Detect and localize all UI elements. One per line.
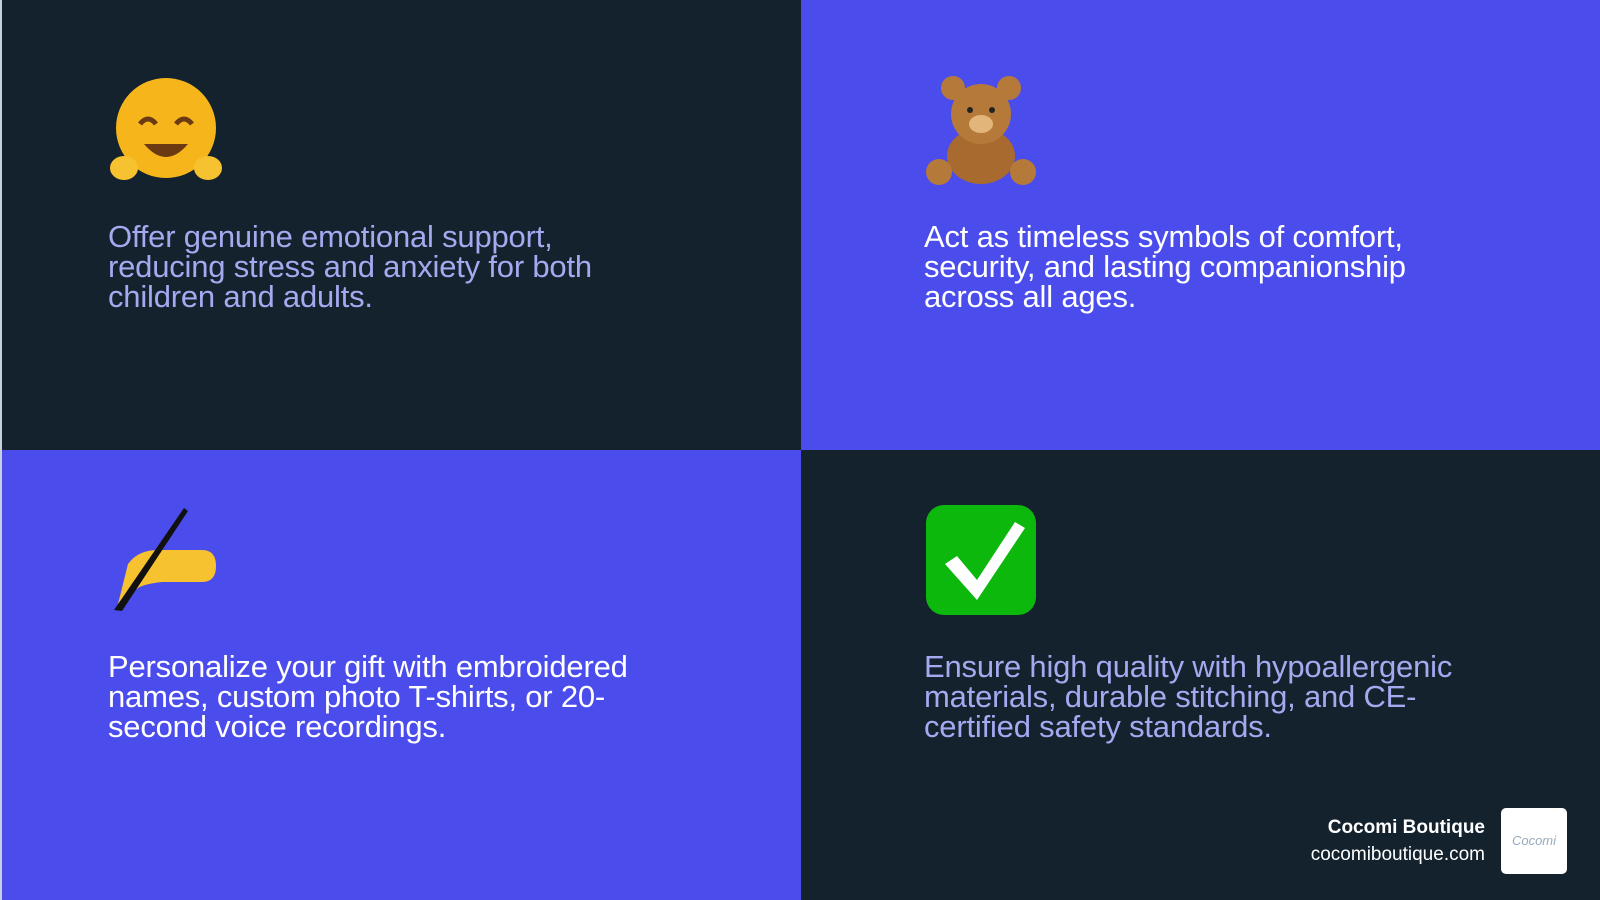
text: comfort: across all ages. — [924, 279, 1136, 314]
text: comfort: Act as timeless symbols of comfort, — [924, 219, 1403, 254]
icon: writing hand — [114, 508, 216, 611]
panel: comfort — [801, 0, 1600, 450]
text: emotional support: Offer genuine emotional support, — [108, 219, 553, 254]
logo — [1501, 808, 1567, 874]
panel: personalize — [2, 450, 801, 900]
panel: quality — [801, 450, 1600, 900]
text: quality: Ensure high quality with hypoallergenic — [924, 649, 1452, 684]
text: quality: certified safety standards. — [924, 709, 1272, 744]
panel: emotional support — [2, 0, 801, 450]
text: comfort — [924, 219, 1406, 314]
brand block — [1311, 808, 1567, 874]
brand url: cocomiboutique.com — [1311, 844, 1485, 865]
text: comfort: security, and lasting companionship — [924, 249, 1406, 284]
text: personalize: second voice recordings. — [108, 709, 446, 744]
text: emotional support: children and adults. — [108, 279, 373, 314]
logo: Cocomi — [1512, 833, 1556, 848]
text: personalize: names, custom photo T-shirts, or 20- — [108, 679, 605, 714]
text: personalize: Personalize your gift with embroidered — [108, 649, 628, 684]
icon: hugging face — [110, 78, 222, 180]
text: quality: materials, durable stitching, and CE- — [924, 679, 1416, 714]
text: emotional support — [108, 219, 592, 314]
text: personalize — [108, 649, 628, 744]
icon: teddy bear — [926, 76, 1036, 185]
text: emotional support: reducing stress and anxiety for both — [108, 249, 592, 284]
brand name: Cocomi Boutique — [1328, 817, 1485, 838]
text: quality — [924, 649, 1452, 744]
icon: check mark — [926, 505, 1036, 615]
